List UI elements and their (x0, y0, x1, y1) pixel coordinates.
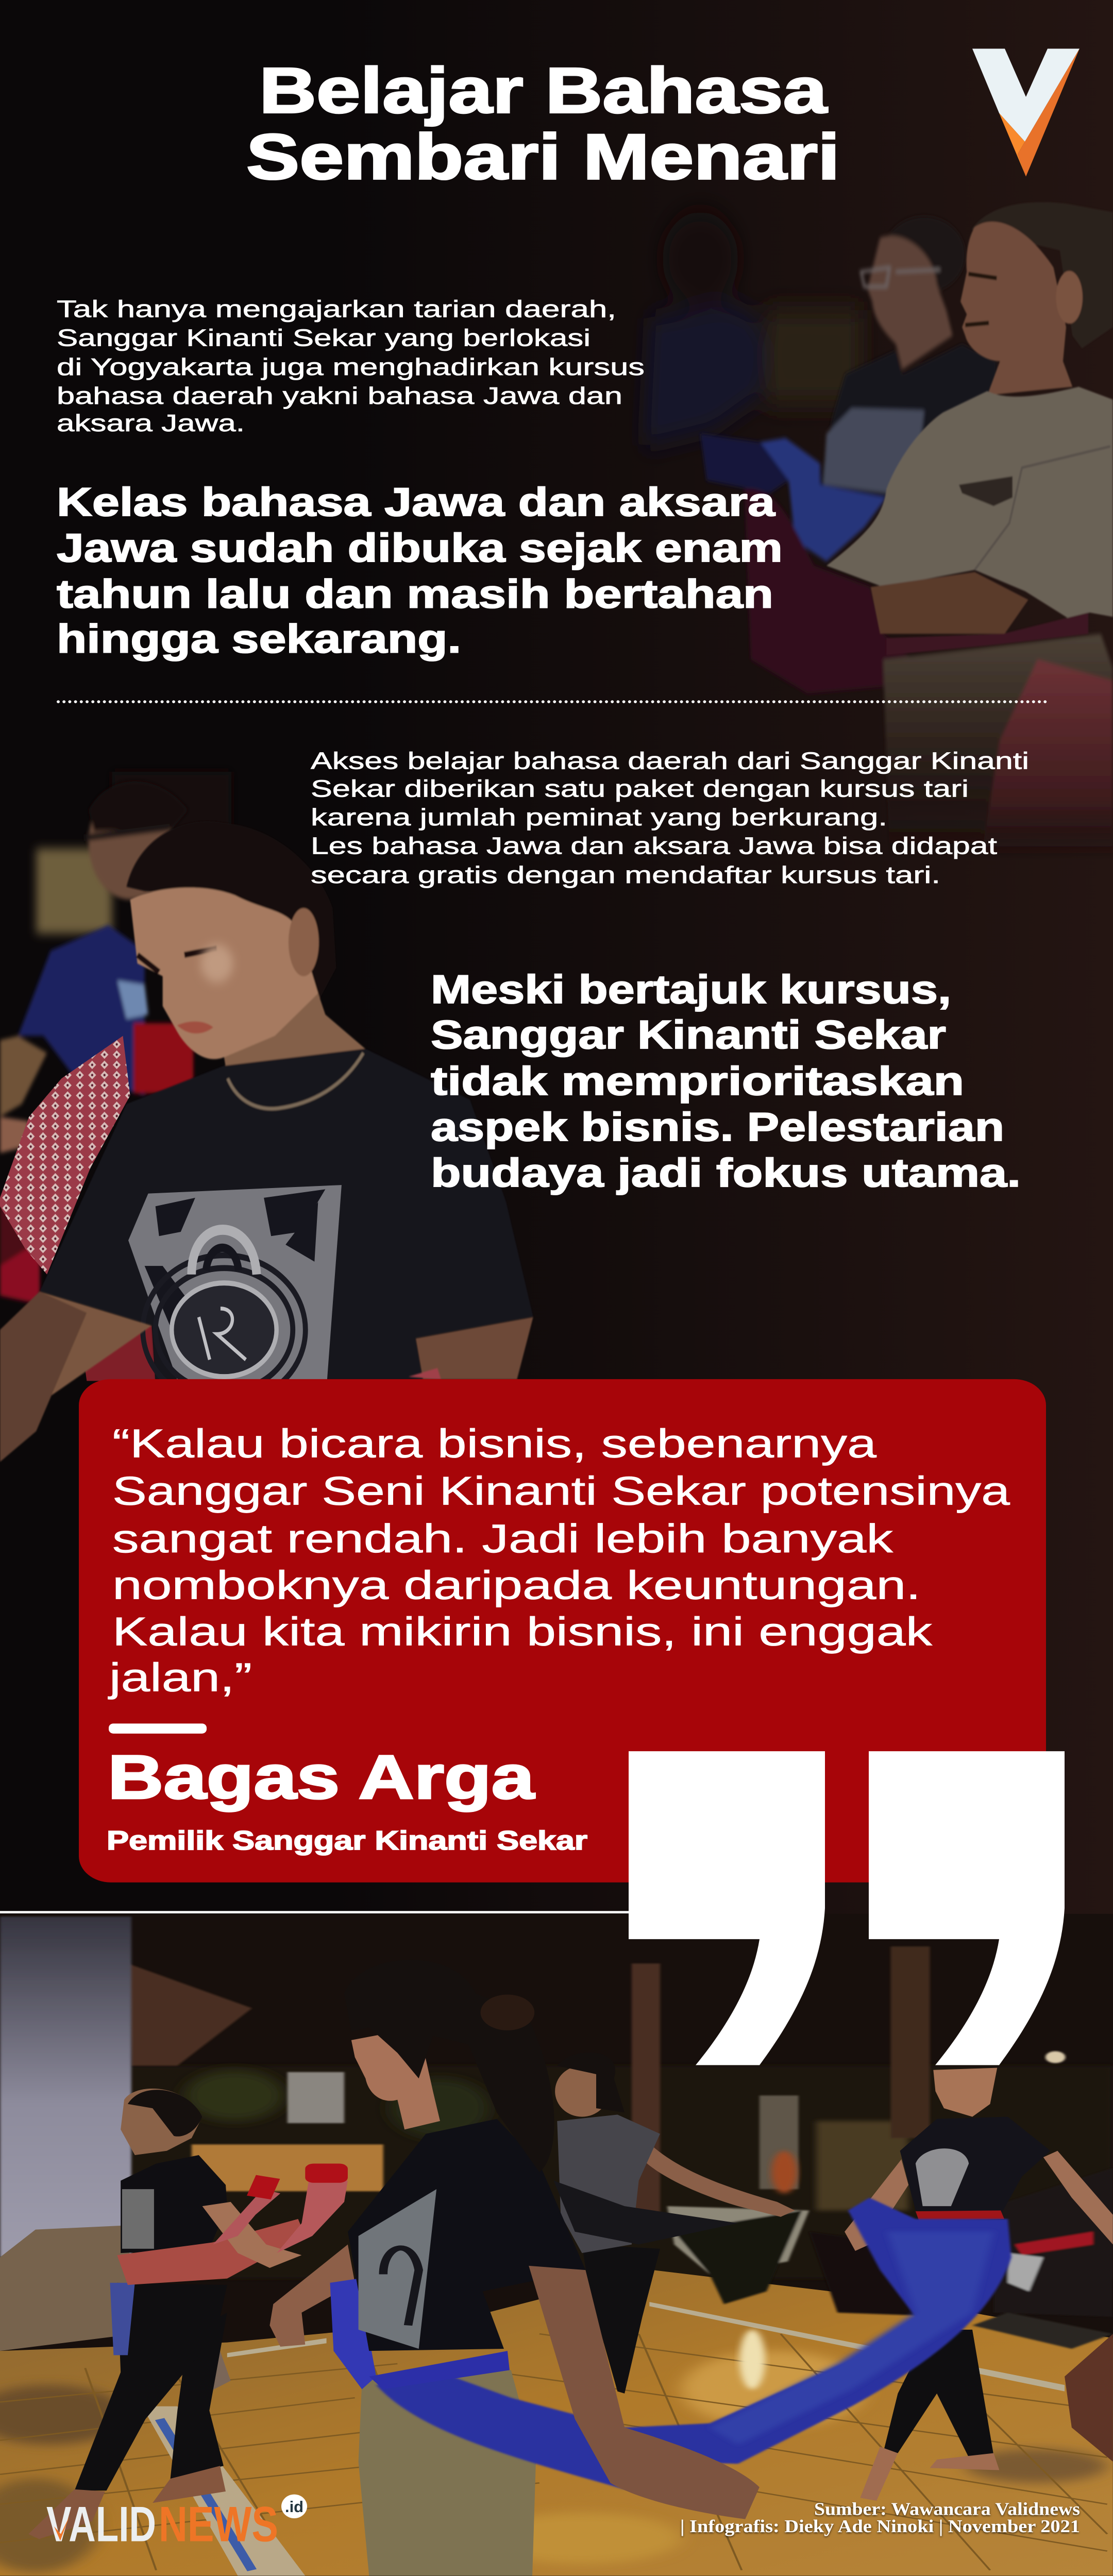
dancer: right (845, 2068, 1113, 2501)
photo: dancers top right (644, 202, 1113, 859)
text block: intro: di Yogyakarta juga menghadirkan kursus (57, 353, 645, 380)
logo: Validnews wordmark (46, 2495, 307, 2552)
text block: access: karena jumlah peminat yang berkurang. (311, 804, 887, 831)
title: Sembari Menari (246, 121, 840, 193)
dancer: grey shirt (553, 2053, 795, 2394)
divider dash (109, 1723, 207, 1734)
blue sash flowing (376, 2198, 1011, 2489)
white rule (0, 1911, 631, 1913)
text block: highlight 1: Kelas bahasa Jawa dan aksara (57, 480, 775, 524)
closing quote mark (629, 1751, 1065, 2065)
text block: highlight 2: budaya jadi fokus utama. (431, 1151, 1021, 1195)
text block: highlight 2: Meski bertajuk kursus, (431, 968, 951, 1012)
text block: highlight 1 (57, 480, 783, 662)
text block: access: Sekar diberikan satu paket dengan kursus tari (311, 775, 969, 802)
shirt print (128, 1185, 342, 1404)
text block: highlight 2: tidak memprioritaskan (431, 1059, 964, 1104)
quote text: sangat rendah. Jadi lebih banyak (112, 1517, 893, 1561)
photo: girl in black shirt (0, 772, 533, 1462)
title: Belajar Bahasa (259, 54, 828, 126)
logo: Validnews wordmark: .id (285, 2498, 303, 2516)
text block: intro: bahasa daerah yakni bahasa Jawa dan (57, 383, 622, 410)
dancer: main (269, 1960, 760, 2519)
text block: access (311, 748, 1029, 888)
background structures (128, 1946, 1113, 2279)
text block: highlight 1: Jawa sudah dibuka sejak enam (57, 526, 783, 570)
text block: highlight 2 (431, 968, 1021, 1195)
text block: highlight 1: tahun lalu dan masih bertahan (57, 572, 773, 617)
speaker role: Pemilik Sanggar Kinanti Sekar (107, 1826, 587, 1855)
logo: V mark (972, 48, 1080, 177)
dotted divider (58, 700, 1050, 703)
motorbikes (667, 2168, 1113, 2349)
red quote panel (79, 1379, 1046, 1883)
text block: highlight 2: Sanggar Kinanti Sekar (431, 1013, 946, 1057)
logo: Validnews wordmark: VALID (46, 2497, 156, 2552)
text block: intro (57, 296, 645, 437)
title (246, 54, 840, 193)
source credit: | Infografis: Dieky Ade Ninoki | November 2021 (680, 2516, 1080, 2536)
photo: dancers bottom (0, 1914, 1113, 2576)
logo: Validnews wordmark: NEWS (159, 2497, 278, 2552)
text block: intro: Sanggar Kinanti Sekar yang berlokasi (57, 325, 591, 351)
text block: intro: aksara Jawa. (57, 410, 245, 437)
floor (0, 2270, 1113, 2575)
source credit (680, 2499, 1080, 2536)
quote text: “Kalau bicara bisnis, sebenarnya (112, 1422, 877, 1466)
text block: access: secara gratis dengan mendaftar kursus tari. (311, 862, 940, 888)
source credit: Sumber: Wawancara Validnews (814, 2499, 1080, 2519)
quote text: jalan,” (108, 1655, 252, 1700)
text block: highlight 1: hingga sekarang. (57, 617, 461, 662)
dancer: right edge (1065, 2334, 1113, 2462)
quote text: nomboknya daripada keuntungan. (112, 1564, 921, 1608)
text block: highlight 2: aspek bisnis. Pelestarian (431, 1105, 1004, 1149)
text block: access: Akses belajar bahasa daerah dari Sanggar Kinanti (311, 748, 1029, 774)
quote text (108, 1422, 1010, 1700)
text block: intro: Tak hanya mengajarkan tarian daerah, (57, 296, 616, 323)
text block: access: Les bahasa Jawa dan aksara Jawa bisa didapat (311, 833, 998, 859)
dancer: left (28, 2089, 348, 2539)
quote text: Kalau kita mikirin bisnis, ini enggak (112, 1609, 933, 1654)
quote text: Sanggar Seni Kinanti Sekar potensinya (112, 1469, 1010, 1514)
speaker name: Bagas Arga (108, 1742, 535, 1812)
main dancer trousers (359, 2370, 536, 2575)
